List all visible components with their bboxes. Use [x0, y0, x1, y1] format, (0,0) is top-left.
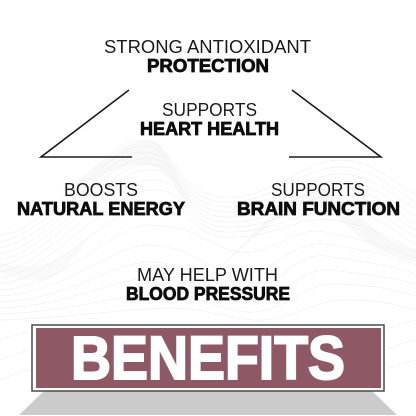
- text block: blood pressure: BLOOD PRESSURE: [126, 283, 290, 304]
- heading: strong antioxidant protection: STRONG ANTIOXIDANT: [104, 36, 311, 57]
- arrow: left bracket: [41, 90, 132, 157]
- text block: natural energy: [17, 179, 186, 219]
- text block: heart health: HEART HEALTH: [140, 118, 279, 139]
- text block: natural energy: BOOSTS: [64, 179, 138, 200]
- text block: heart health: [140, 99, 279, 139]
- banner shadow: [19, 391, 397, 415]
- text block: brain function: SUPPORTS: [271, 179, 365, 200]
- arrow: right bracket: [289, 90, 381, 157]
- heading: strong antioxidant protection: PROTECTION: [147, 55, 269, 76]
- text block: blood pressure: MAY HELP WITH: [137, 264, 278, 285]
- text block: blood pressure: [126, 264, 290, 304]
- text block: natural energy: NATURAL ENERGY: [17, 198, 186, 219]
- text block: heart health: SUPPORTS: [162, 99, 257, 120]
- heading: strong antioxidant protection: [104, 36, 311, 76]
- text block: brain function: [237, 179, 400, 219]
- text block: brain function: BRAIN FUNCTION: [237, 198, 400, 219]
- banner: benefits: BENEFITS: [71, 324, 345, 392]
